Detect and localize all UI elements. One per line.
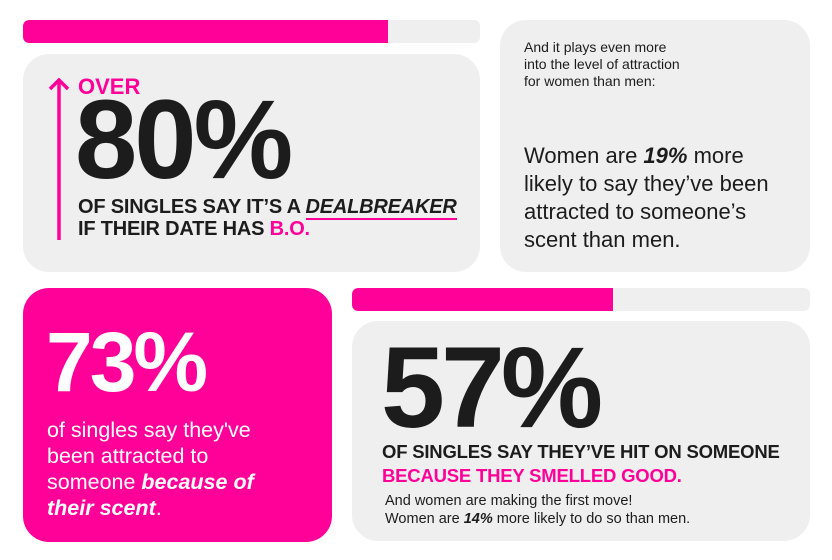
text: intro	[524, 39, 680, 89]
label: OVER: OVER	[78, 74, 140, 99]
text: women 19%: Women are 19% more	[524, 143, 744, 168]
progress bar: 80%	[23, 20, 480, 43]
text: intro: And it plays even more	[524, 39, 666, 55]
text: 73% caption: someone because of	[47, 470, 254, 494]
stat: 73%: 73%	[46, 315, 205, 409]
text: 57% caption: OF SINGLES SAY THEY’VE HIT ON SOMEONE	[382, 441, 780, 462]
text: women 19%: likely to say they’ve been	[524, 171, 769, 196]
progress bar: 57%	[352, 288, 810, 311]
text: 73% caption: been attracted to	[47, 444, 208, 468]
text: intro: for women than men:	[524, 73, 656, 89]
stat: 57%: 57%	[381, 324, 599, 452]
text: 73% caption: of singles say they've	[47, 418, 251, 442]
panel: 57% hit on	[352, 321, 810, 541]
text: intro: into the level of attraction	[524, 56, 680, 72]
text: women 19%: scent than men.	[524, 227, 681, 252]
text: 73% caption: their scent.	[47, 496, 162, 520]
panel: 73% pink	[23, 288, 332, 542]
panel: 80% dealbreaker	[23, 54, 480, 272]
text: women first move	[385, 493, 690, 527]
panel: 57% hit on: BECAUSE THEY SMELLED GOOD.	[382, 465, 682, 486]
text: dealbreaker caption: OF SINGLES SAY IT’S A DEALBREAKER	[78, 196, 457, 218]
stat: 80%: 80%	[75, 77, 290, 202]
text: women first move: And women are making the first move!	[385, 493, 632, 509]
text: 73% caption	[47, 418, 256, 520]
text: women 19%: attracted to someone’s	[524, 199, 746, 224]
panel: 80% dealbreaker: IF THEIR DATE HAS B.O.	[78, 218, 310, 240]
text: women first move: Women are 14% more likely to do so than men.	[385, 511, 690, 527]
icon: up arrow	[48, 78, 70, 240]
text: women 19%	[524, 143, 769, 252]
panel: women attraction	[500, 20, 810, 272]
